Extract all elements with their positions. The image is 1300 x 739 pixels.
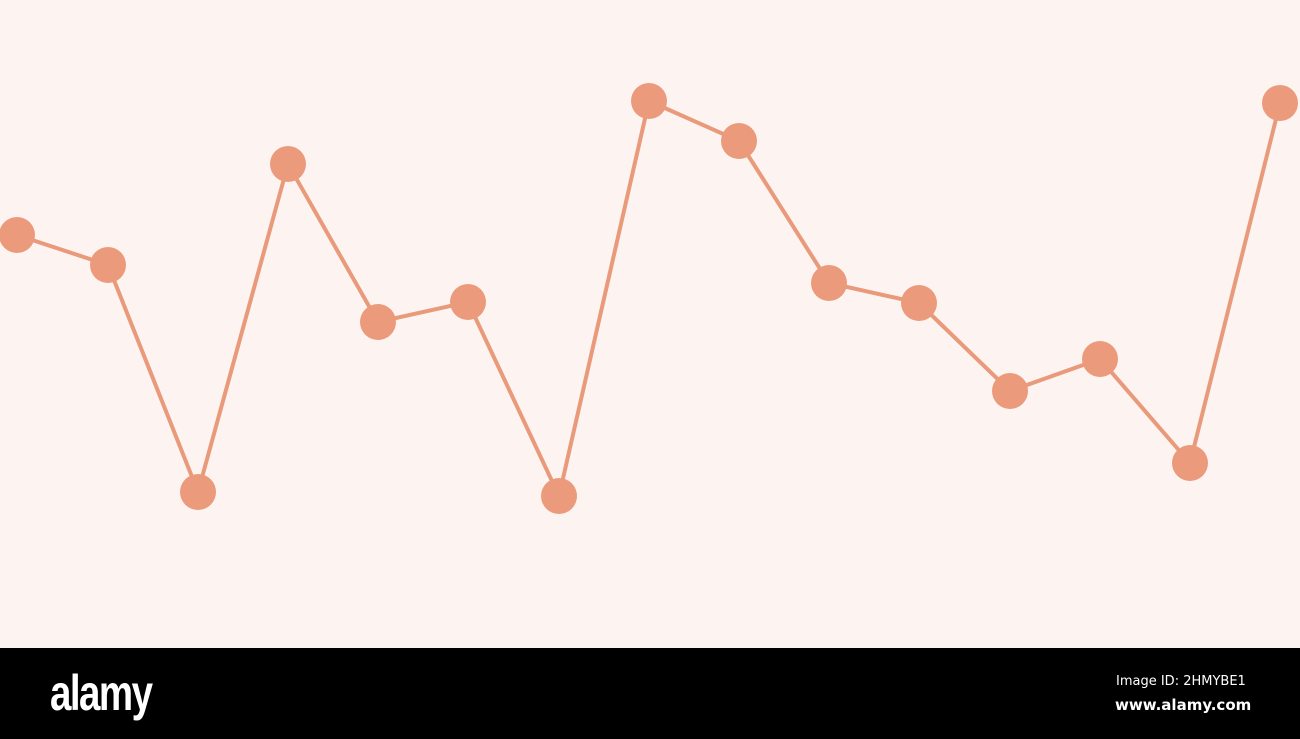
- footer bar: [0, 648, 1300, 739]
- logo text: alamy: [50, 665, 151, 721]
- image id text: Image ID: 2HMYBE1: [1116, 674, 1246, 689]
- url text: www.alamy.com: [1115, 696, 1251, 714]
